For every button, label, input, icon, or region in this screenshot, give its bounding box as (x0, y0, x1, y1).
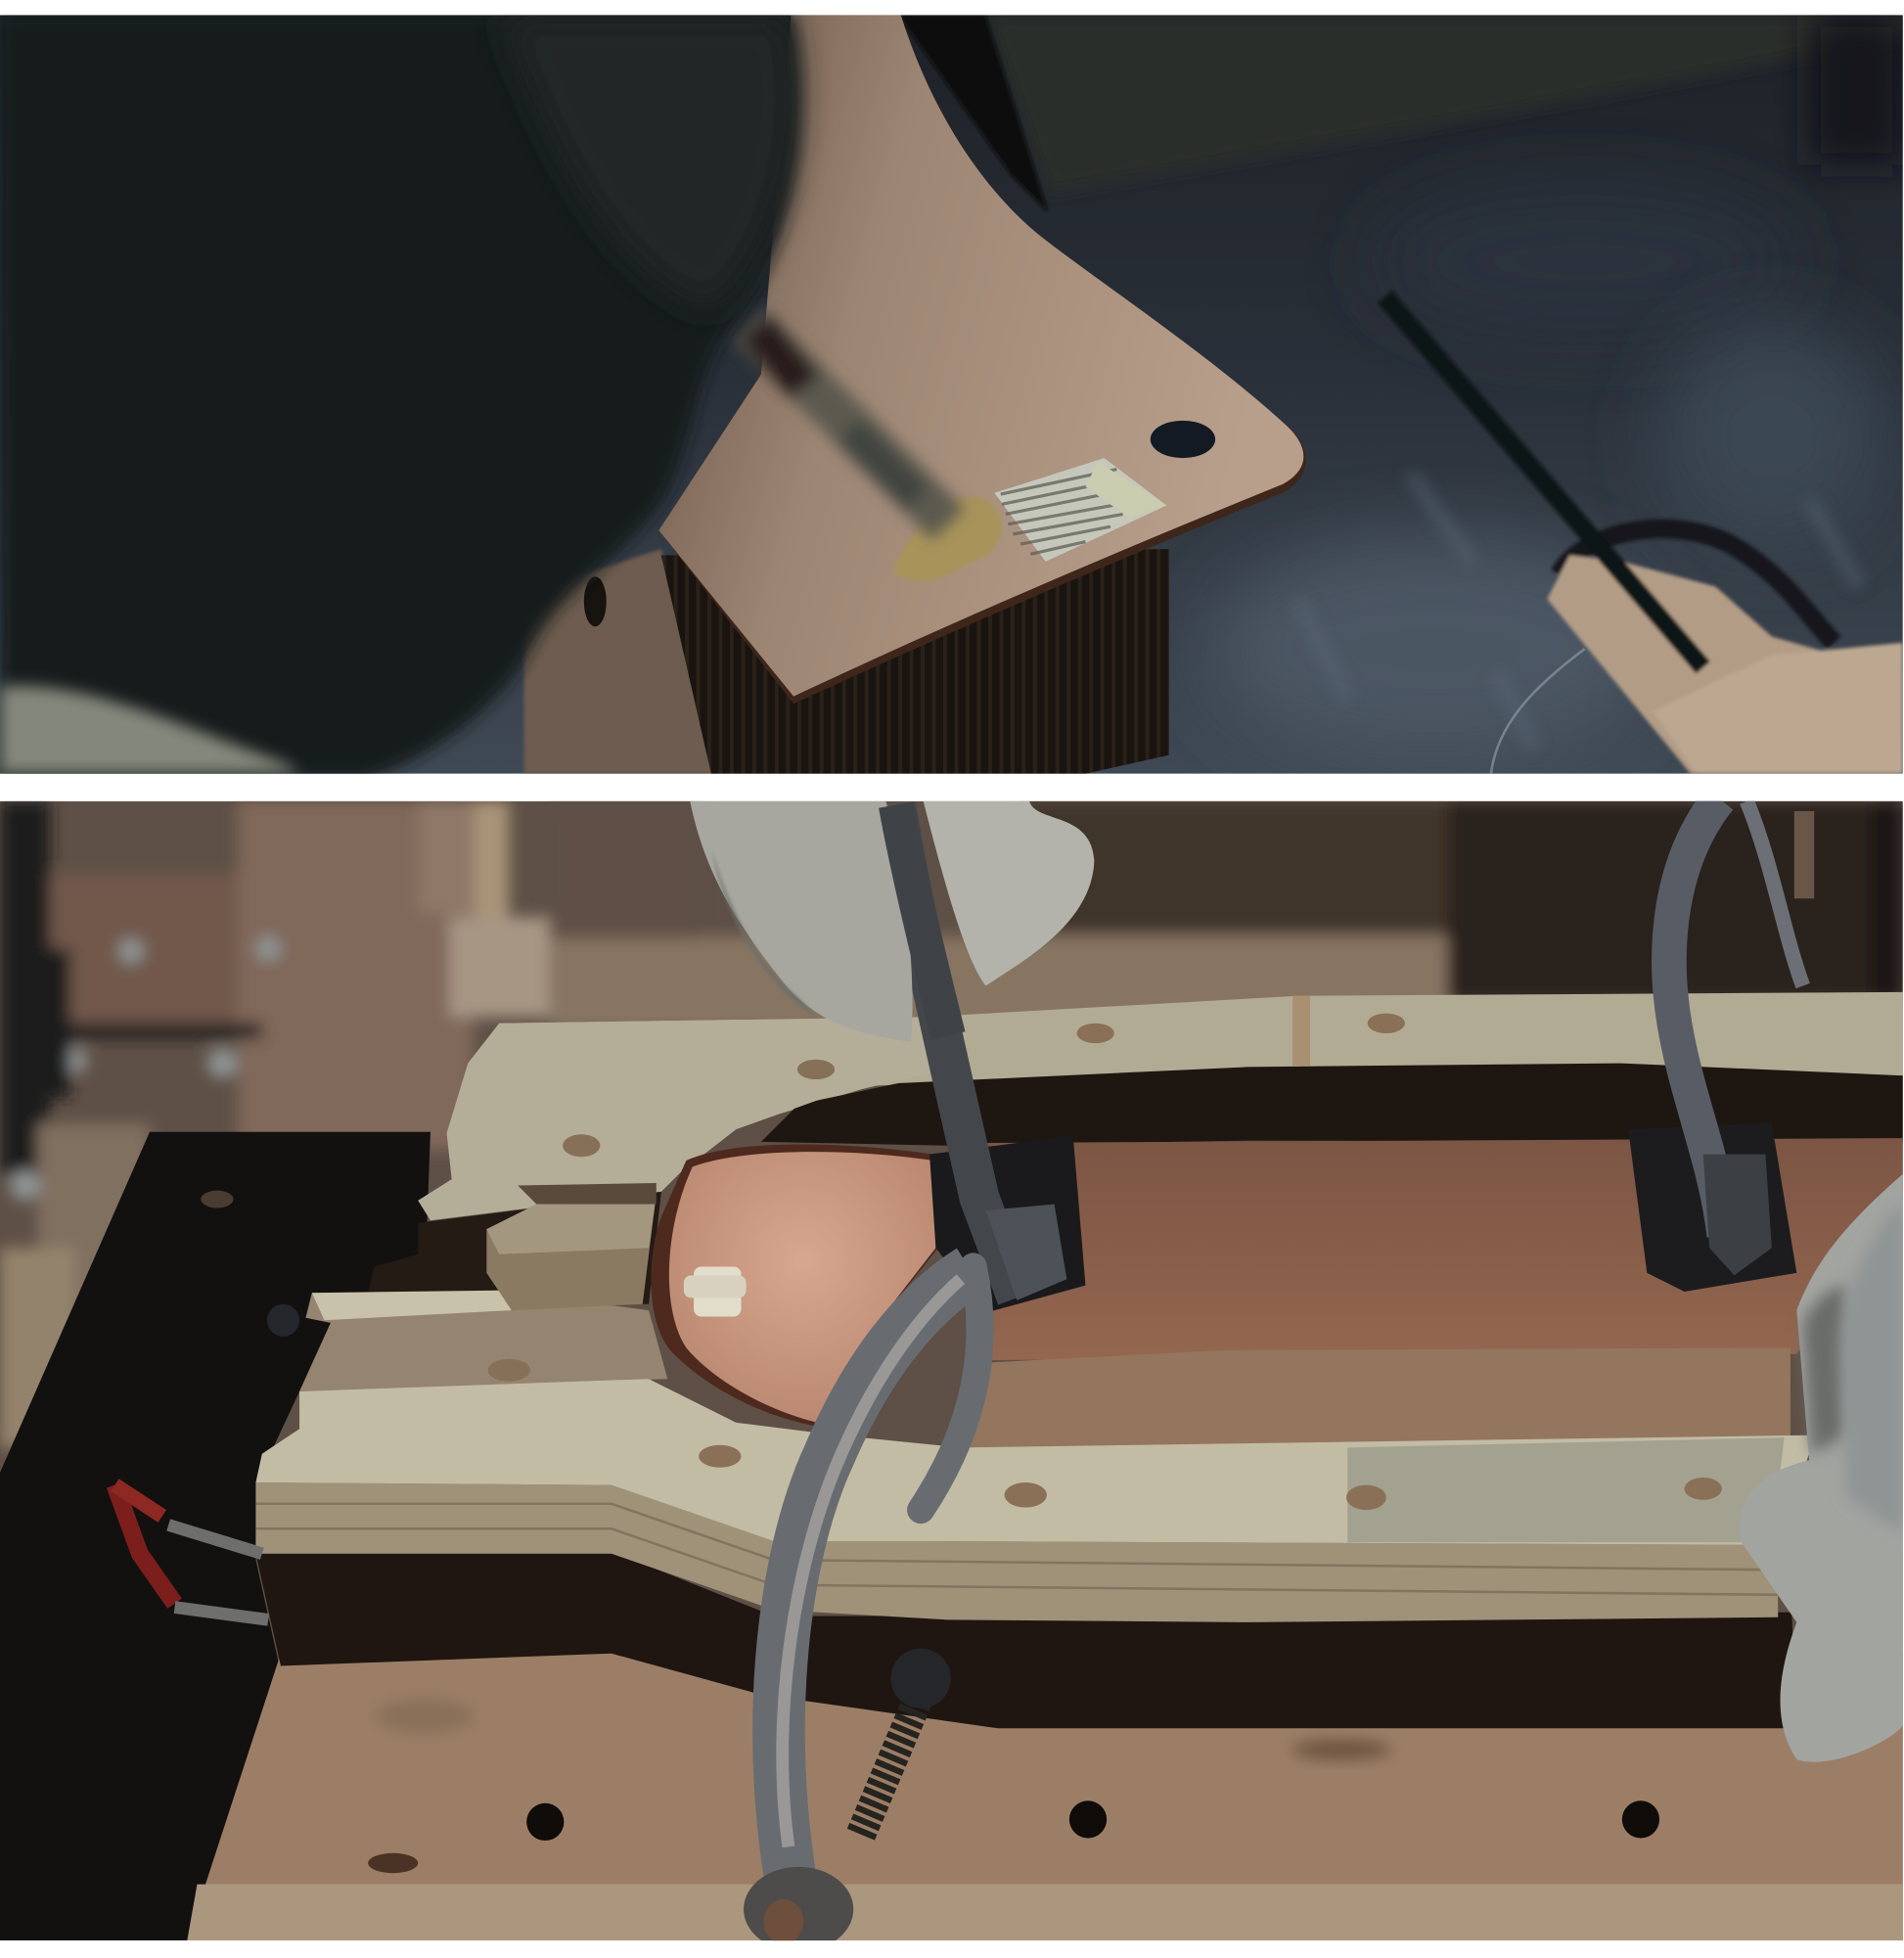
background: blurred workshop shelves (0, 801, 1904, 1940)
red spring clamp (114, 1485, 268, 1619)
light plywood layer of the near form (255, 1482, 1778, 1622)
white peg (684, 1266, 747, 1316)
gloved hand, motion blurred (0, 15, 800, 780)
black table top (0, 1132, 431, 1940)
upper C-clamp foot and arm (896, 805, 1085, 1313)
wooden block wedge (486, 1183, 657, 1310)
lower wooden board with drilled holes (187, 1654, 1904, 1940)
right C-clamp (1628, 798, 1814, 1292)
glove gripping upper clamp (690, 801, 1094, 1042)
right glove (1740, 1173, 1904, 1762)
brush handle (748, 325, 948, 524)
background: workshop floor and wall (0, 15, 1904, 774)
glue smear (892, 458, 1166, 581)
dark plywood block under the veneer (524, 549, 1169, 774)
left end of press form (267, 1017, 929, 1391)
bent pink veneer (651, 1144, 938, 1429)
top surface of the near form (255, 1379, 1815, 1545)
far side of press form (499, 992, 1904, 1450)
curved veneer plate (658, 15, 1306, 704)
hole in veneer (1151, 421, 1215, 458)
panel: bottom photo, clamping the veneer in a press form (0, 798, 1904, 1952)
panel: top photo, brushing glue onto a veneer (0, 15, 1904, 780)
tool on the floor (1385, 297, 1903, 774)
dark lower layer of the near form (255, 1554, 1796, 1728)
large front C-clamp with screw (744, 1266, 980, 1952)
